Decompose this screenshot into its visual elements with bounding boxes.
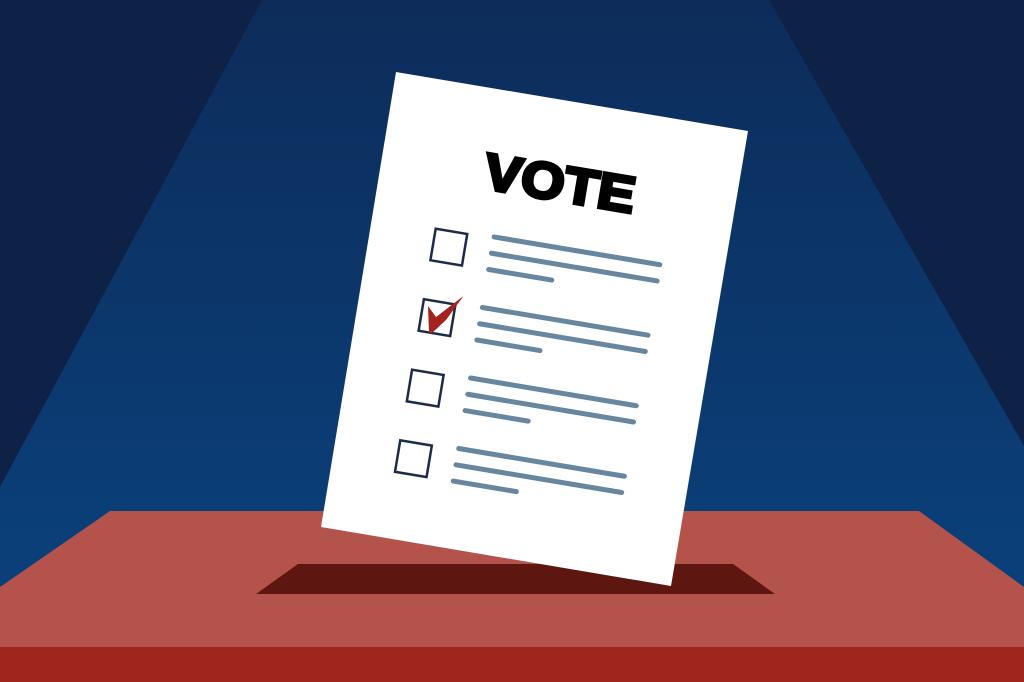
option 4: [395, 439, 624, 509]
ballot paper: [321, 72, 748, 586]
ballot box: front face: [0, 647, 1024, 682]
ballot box: top face: [0, 511, 1024, 648]
text lines 2: [477, 307, 648, 368]
heading: VOTE: VOTE: [480, 143, 640, 224]
icon: red check mark: [428, 296, 464, 333]
text lines 1: [489, 237, 660, 297]
text lines 4: [453, 449, 624, 509]
checkbox 2: [419, 299, 455, 336]
checkbox 3: [407, 370, 444, 407]
checkbox 4: [395, 440, 432, 477]
option 2: [419, 298, 648, 368]
paper contents: [395, 136, 675, 509]
option 3: [407, 368, 636, 439]
ballot box: slot: [256, 564, 775, 594]
text lines 3: [465, 378, 636, 438]
paper sheet: [321, 72, 748, 586]
option 1: [430, 227, 660, 298]
checkbox 1: [430, 229, 467, 266]
